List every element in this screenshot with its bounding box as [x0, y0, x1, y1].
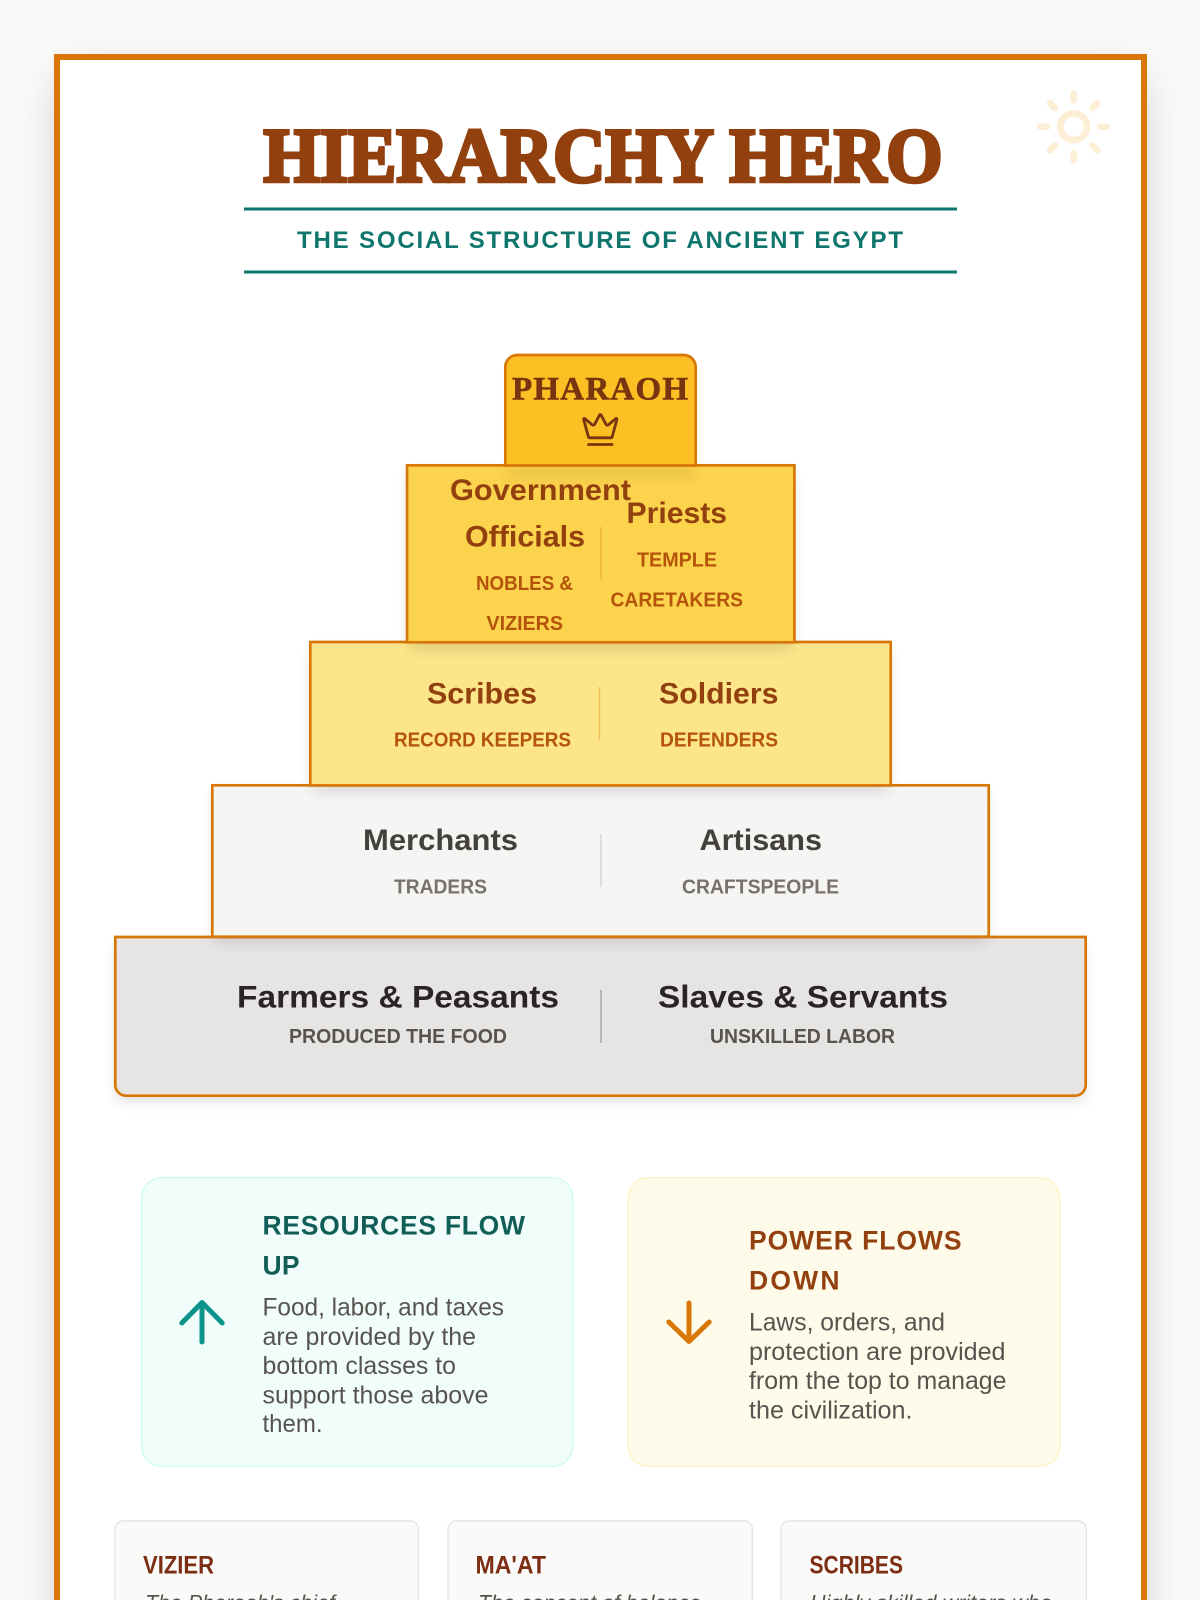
heading: POWER FLOWS	[749, 1226, 962, 1256]
tier 3: scribes and soldiers: DEFENDERS	[660, 728, 778, 752]
heading	[262, 1211, 525, 1281]
panel: power flows down	[628, 1178, 1060, 1466]
tier 2: officials and priests: CARETAKERS	[610, 588, 743, 612]
tier 3: scribes and soldiers: Soldiers	[659, 677, 778, 710]
tier 5: farmers and slaves: PRODUCED THE FOOD	[289, 1025, 507, 1048]
text block: protection are provided	[749, 1338, 1006, 1366]
tier 2: officials and priests: NOBLES &	[476, 572, 573, 595]
text block: Laws, orders, and	[749, 1308, 945, 1336]
tier 3: scribes and soldiers: Scribes	[427, 677, 537, 710]
tier 2: officials and priests: Government	[450, 474, 631, 507]
text block	[262, 1294, 504, 1438]
tier 5: farmers and slaves: Slaves & Servants	[658, 978, 948, 1014]
text block: Food, labor, and taxes	[262, 1294, 504, 1322]
tier 4: merchants and artisans: Merchants	[363, 824, 518, 857]
panel: vizier: VIZIER	[143, 1552, 214, 1580]
icon: crown	[584, 415, 617, 445]
tier 3: scribes and soldiers: RECORD KEEPERS	[394, 728, 571, 752]
tier 5: farmers and slaves	[115, 937, 1086, 1101]
tier 2: officials and priests: Officials	[465, 520, 585, 554]
tier 2: officials and priests: VIZIERS	[486, 612, 563, 635]
text block: from the top to manage	[749, 1367, 1006, 1395]
heading: RESOURCES FLOW	[262, 1211, 525, 1241]
heading	[749, 1226, 962, 1296]
panel: scribes: SCRIBES	[810, 1552, 903, 1580]
tier 4: merchants and artisans: Artisans	[700, 824, 822, 857]
icon: sun	[1040, 93, 1107, 160]
text block: them.	[262, 1410, 322, 1438]
heading: UP	[262, 1251, 300, 1281]
text block: the civilization.	[749, 1396, 912, 1424]
text block: support those above	[262, 1382, 488, 1410]
icon: arrow down	[669, 1303, 709, 1342]
panel: vizier	[115, 1521, 418, 1600]
tier 5: farmers and slaves: Farmers & Peasants	[237, 978, 559, 1014]
tier 4: merchants and artisans: TRADERS	[394, 876, 487, 898]
panel: scribes	[781, 1521, 1086, 1600]
title: HIERARCHY HERO	[264, 112, 942, 198]
subtitle with rules	[244, 208, 957, 274]
panel: ma'at	[448, 1521, 752, 1600]
tier 2: officials and priests: TEMPLE	[637, 548, 717, 572]
text block: are provided by the	[262, 1323, 476, 1351]
tier 4: merchants and artisans	[212, 785, 989, 942]
text block: bottom classes to	[262, 1352, 456, 1380]
text block	[749, 1308, 1006, 1424]
subtitle with rules: THE SOCIAL STRUCTURE OF ANCIENT EGYPT	[297, 227, 903, 254]
tier 5: farmers and slaves: UNSKILLED LABOR	[710, 1025, 895, 1048]
panel: resources flow up	[142, 1178, 573, 1466]
heading: DOWN	[749, 1266, 840, 1296]
pyramid	[115, 355, 1086, 1101]
tier 1: pharaoh: PHARAOH	[512, 372, 688, 408]
tier 1: pharaoh	[505, 355, 696, 475]
tier 2: officials and priests	[407, 465, 794, 649]
tier 3: scribes and soldiers	[310, 642, 891, 791]
panel: ma'at: MA'AT	[476, 1552, 546, 1580]
tier 4: merchants and artisans: CRAFTSPEOPLE	[682, 876, 839, 898]
icon: arrow up	[182, 1302, 222, 1342]
tier 2: officials and priests: Priests	[626, 497, 727, 530]
